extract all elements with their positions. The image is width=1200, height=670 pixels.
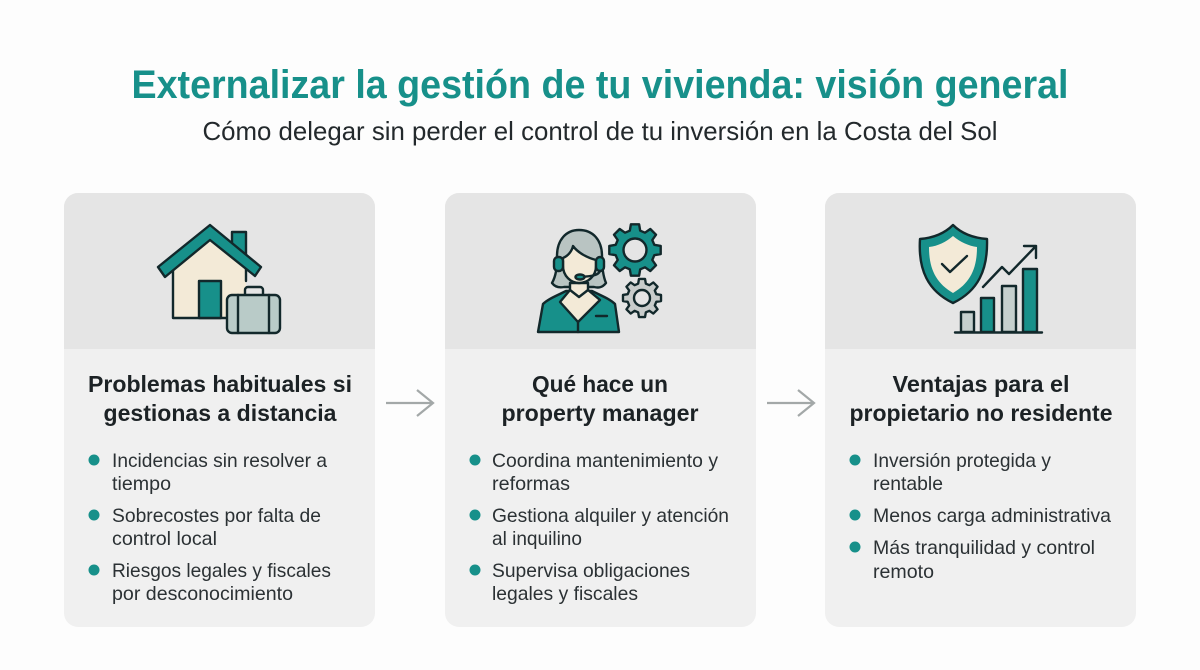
list: por desconocimiento: [112, 583, 293, 605]
heading: propietario no residente: [850, 400, 1112, 426]
heading: [502, 371, 698, 426]
list: tiempo: [112, 473, 171, 495]
heading: gestionas a distancia: [104, 400, 337, 426]
list: rentable: [873, 473, 943, 495]
panel: ventajas: [825, 193, 1136, 627]
list: [470, 450, 729, 605]
title: Externalizar la gestión de tu vivienda: visión general: [132, 63, 1068, 107]
list: [88, 450, 331, 605]
list: Sobrecostes por falta de: [112, 505, 321, 527]
list: Menos carga administrativa: [873, 505, 1111, 527]
list: Supervisa obligaciones: [492, 560, 690, 582]
list: Gestiona alquiler y atención: [492, 505, 729, 527]
heading: Qué hace un: [532, 371, 668, 397]
icon: agent with gears: [538, 224, 661, 332]
arrow 1: [386, 390, 433, 416]
heading: [850, 371, 1112, 426]
list: Inversión protegida y: [873, 450, 1051, 472]
arrow 2: [767, 390, 814, 416]
list: Riesgos legales y fiscales: [112, 560, 331, 582]
list: al inquilino: [492, 528, 582, 550]
list: Coordina mantenimiento y: [492, 450, 718, 472]
list: reformas: [492, 473, 570, 495]
icon: shield and growth chart: [920, 225, 1042, 332]
heading: [88, 371, 352, 426]
list: [850, 450, 1111, 583]
list: Más tranquilidad y control: [873, 537, 1095, 559]
list: legales y fiscales: [492, 583, 638, 605]
heading: property manager: [502, 400, 698, 426]
list: control local: [112, 528, 217, 550]
heading: Problemas habituales si: [88, 371, 352, 397]
panel: property manager: [445, 193, 756, 627]
list: remoto: [873, 561, 934, 583]
panel: problemas: [64, 193, 375, 627]
subtitle: Cómo delegar sin perder el control de tu inversión en la Costa del Sol: [202, 116, 998, 146]
icon: house and suitcase: [158, 225, 280, 333]
heading: Ventajas para el: [892, 371, 1070, 397]
list: Incidencias sin resolver a: [112, 450, 327, 472]
